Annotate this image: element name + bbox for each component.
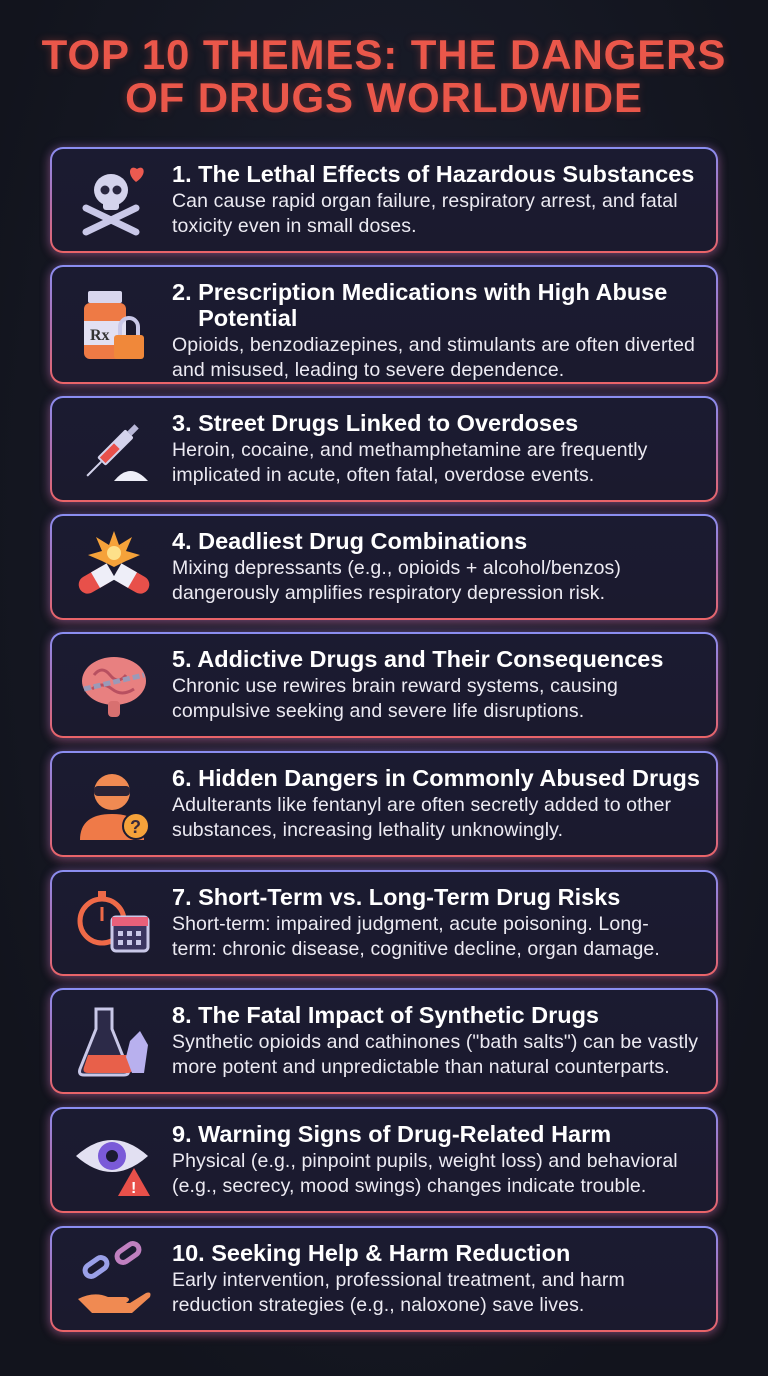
panel: 8 synthetic drugs [50,988,718,1094]
panel: 5 addictive drugs [50,632,718,738]
panel: 4 drug combinations: 4. Deadliest Drug Combinations [172,528,527,554]
panel: 8 synthetic drugs: 8. The Fatal Impact of Synthetic Drugs [172,1002,599,1028]
icon: pill bottle with lock [84,291,144,359]
icon: pill bottle with lock: Rx [90,326,110,344]
panel: 1 lethal effects: toxicity even in small doses. [172,215,417,237]
panel: 3 street drugs: implicated in acute, often fatal, overdose events. [172,464,594,486]
icon: eye with warning triangle: ! [131,1180,136,1197]
panel: 9 warning signs [50,1107,718,1213]
panel: 10 seeking help: 10. Seeking Help & Harm Reduction [172,1240,570,1266]
panel: 1 lethal effects: 1. The Lethal Effects of Hazardous Substances [172,161,694,187]
panel: 4 drug combinations: dangerously amplifies respiratory depression risk. [172,582,605,604]
title: TOP 10 THEMES: THE DANGERS [42,31,726,78]
panel: 9 warning signs: Physical (e.g., pinpoint pupils, weight loss) and behavioral [172,1150,678,1172]
panel: 9 warning signs: 9. Warning Signs of Drug-Related Harm [172,1121,611,1147]
panel: 4 drug combinations [50,514,718,620]
panel: 2 prescription medications: and misused, leading to severe dependence. [172,359,564,381]
title [40,31,728,121]
icon: masked figure with question mark [80,774,148,840]
panel: 2 prescription medications [50,265,718,384]
icon: chained brain [82,657,146,717]
icon: eye with warning triangle [76,1140,150,1197]
panel: 3 street drugs: 3. Street Drugs Linked to Overdoses [172,410,578,436]
panel: 2 prescription medications: Opioids, benzodiazepines, and stimulants are often diverted [172,334,695,356]
panel: 3 street drugs: Heroin, cocaine, and methamphetamine are frequently [172,439,648,461]
panel: 8 synthetic drugs: more potent and unpredictable than natural counterparts. [172,1056,670,1078]
panel: 5 addictive drugs: compulsive seeking and severe life disruptions. [172,700,584,722]
panel: 10 seeking help [50,1226,718,1332]
icon: syringe and powder [86,424,148,481]
icon: capsules with explosion [78,531,150,594]
panel: 1 lethal effects: Can cause rapid organ failure, respiratory arrest, and fatal [172,190,678,212]
panel: 5 addictive drugs: 5. Addictive Drugs and Their Consequences [172,646,663,672]
panel: 2 prescription medications: Potential [198,305,297,331]
icon: skull and heart [82,168,144,236]
icon: flask and crystals [78,1008,148,1076]
panel: 7 short vs long term: term: chronic disease, cognitive decline, organ damage. [172,938,660,960]
panel: 6 hidden dangers: Adulterants like fentanyl are often secretly added to other [172,794,671,816]
panel: 6 hidden dangers: 6. Hidden Dangers in Commonly Abused Drugs [172,765,700,791]
icon: masked figure with question mark: ? [130,817,141,837]
panel: 2 prescription medications: 2. Prescription Medications with High Abuse [172,279,667,305]
icon: stopwatch and calendar [78,891,150,952]
panel: 4 drug combinations: Mixing depressants (e.g., opioids + alcohol/benzos) [172,557,621,579]
panel: 7 short vs long term: 7. Short-Term vs. Long-Term Drug Risks [172,884,620,910]
panel: 5 addictive drugs: Chronic use rewires brain reward systems, causing [172,675,618,697]
title: OF DRUGS WORLDWIDE [125,74,643,121]
panel: 3 street drugs [50,396,718,502]
panel: 6 hidden dangers: substances, increasing lethality unknowingly. [172,819,563,841]
panel: 8 synthetic drugs: Synthetic opioids and cathinones ("bath salts") can be vastly [172,1031,698,1053]
panel: 6 hidden dangers [50,751,718,857]
panel: 7 short vs long term [50,870,718,976]
panel: 10 seeking help: reduction strategies (e.g., naloxone) save lives. [172,1294,584,1316]
panel: 1 lethal effects [50,147,718,253]
panel: 9 warning signs: (e.g., secrecy, mood swings) changes indicate trouble. [172,1175,646,1197]
icon: broken chain and hand [78,1241,150,1313]
panel: 10 seeking help: Early intervention, professional treatment, and harm [172,1269,625,1291]
panel: 7 short vs long term: Short-term: impaired judgment, acute poisoning. Long- [172,913,649,935]
